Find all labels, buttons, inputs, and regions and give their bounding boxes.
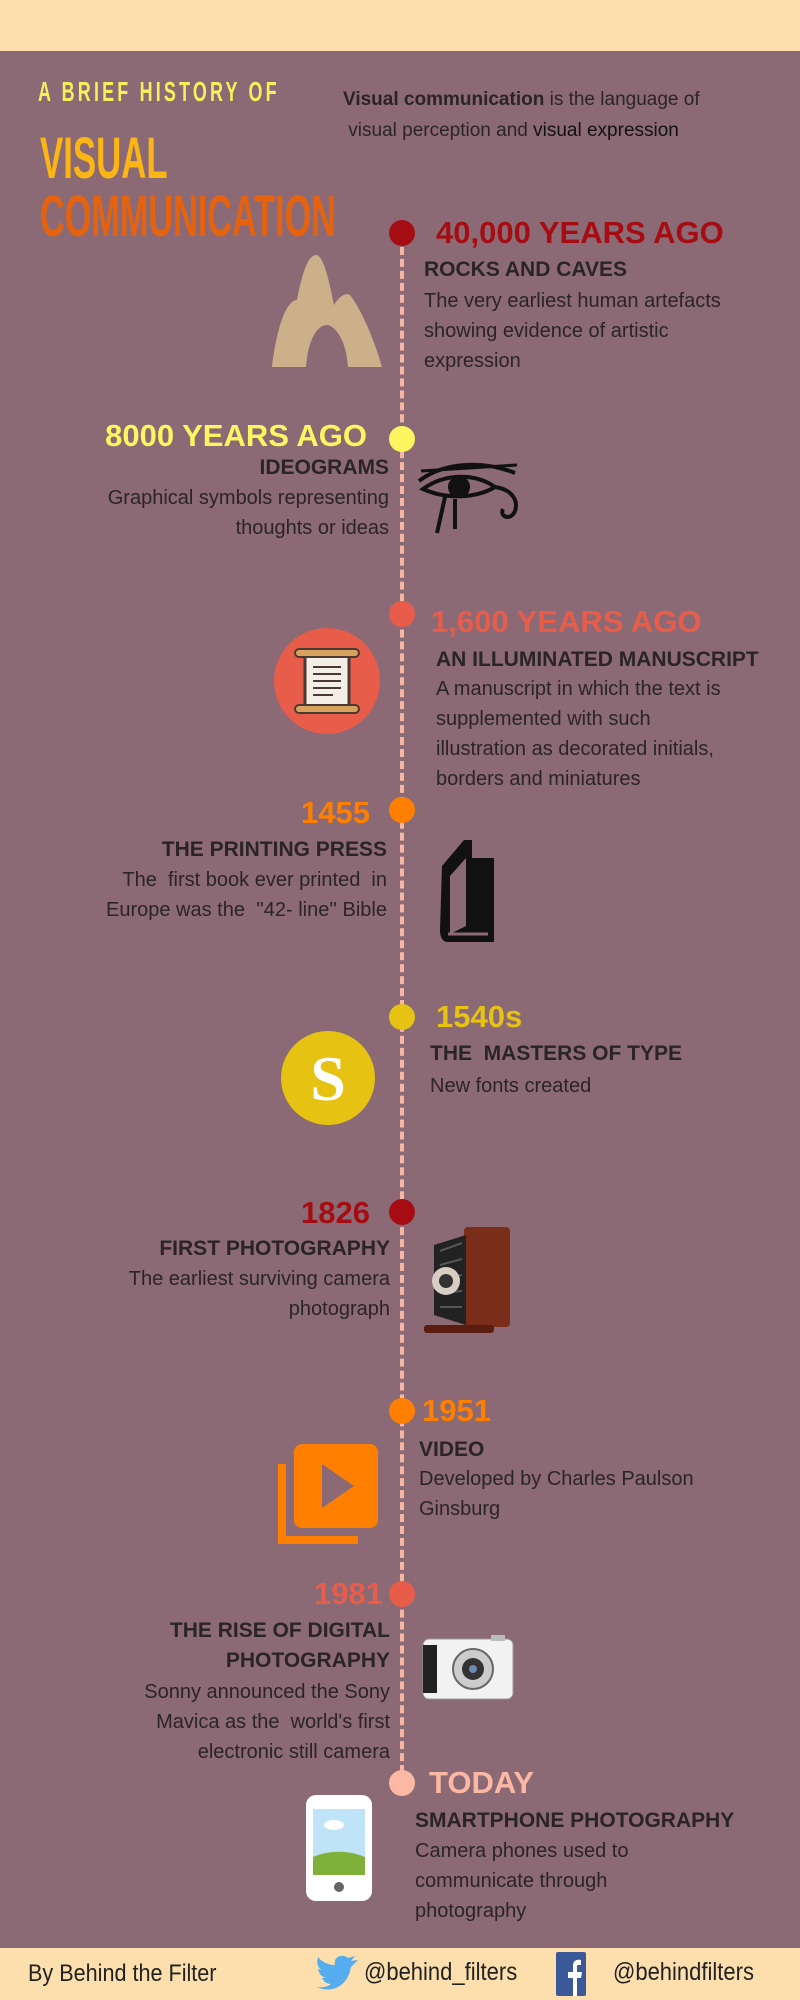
icon: cave — [272, 255, 382, 367]
entry: 1,600 years ago: supplemented with such — [436, 708, 651, 730]
top band — [0, 0, 800, 51]
entry: 1981: PHOTOGRAPHY — [226, 1649, 390, 1672]
icon: book — [440, 840, 494, 942]
icon: facebook — [556, 1952, 586, 1996]
icon: eye of horus — [418, 462, 518, 534]
entry: 1951: 1951 — [422, 1393, 491, 1428]
footer: By Behind the Filter — [28, 1960, 216, 1987]
icon: scroll circle — [274, 628, 380, 734]
entry: 1951: Ginsburg — [419, 1498, 500, 1520]
timeline line — [400, 235, 404, 1785]
icon: video play — [278, 1444, 378, 1544]
icon: vintage camera — [424, 1227, 510, 1333]
entry: 8000 years ago: 8000 YEARS AGO — [105, 418, 367, 453]
entry: 1455: The first book ever printed in — [122, 869, 387, 891]
entry: 40,000 years ago — [272, 215, 724, 372]
entry: 1981: 1981 — [314, 1576, 383, 1611]
title — [38, 76, 336, 249]
title: A BRIEF HISTORY OF — [38, 76, 280, 107]
entry: 1,600 years ago: illustration as decorated initials, — [436, 738, 714, 760]
icon: S circle — [281, 1031, 375, 1125]
entry: 1826: The earliest surviving camera — [129, 1268, 390, 1290]
intro text: Visual communication is the language of — [343, 89, 700, 110]
intro text: visual perception and visual expression — [348, 120, 679, 141]
entry: today: communicate through — [415, 1870, 607, 1892]
title: COMMUNICATION — [40, 184, 336, 249]
icon: S circle: S — [310, 1043, 346, 1114]
entry: 1455: 1455 — [301, 795, 370, 830]
footer — [0, 1948, 800, 2000]
entry: 1951: Developed by Charles Paulson — [419, 1468, 694, 1490]
entry: 40,000 years ago: 40,000 YEARS AGO — [436, 215, 724, 250]
entry: today: SMARTPHONE PHOTOGRAPHY — [415, 1809, 734, 1832]
entry: 1826 — [129, 1195, 510, 1333]
icon: smartphone — [306, 1795, 372, 1901]
entry: 8000 years ago: Graphical symbols representing — [108, 487, 389, 509]
footer: @behind_filters — [364, 1958, 517, 1986]
entry: 1455 — [106, 795, 494, 942]
entry: 40,000 years ago: expression — [424, 350, 521, 372]
entry: 8000 years ago — [105, 418, 518, 539]
entry: 1,600 years ago — [274, 601, 759, 790]
entry: 1540s: New fonts created — [430, 1075, 591, 1097]
entry: today: Camera phones used to — [415, 1840, 628, 1862]
entry: 1455: Europe was the ''42- line'' Bible — [106, 899, 387, 921]
title: VISUAL — [40, 126, 168, 191]
footer: @behindfilters — [613, 1958, 754, 1986]
entry: 8000 years ago: thoughts or ideas — [236, 517, 389, 539]
entry: 1540s — [281, 999, 682, 1125]
entry: 1826: 1826 — [301, 1195, 370, 1230]
entry: 1540s: THE MASTERS OF TYPE — [430, 1042, 682, 1065]
entry: today: photography — [415, 1900, 526, 1922]
entry: 1455: THE PRINTING PRESS — [162, 838, 387, 861]
entry: 40,000 years ago: showing evidence of artistic — [424, 320, 669, 342]
icon: twitter — [317, 1956, 358, 1990]
entry: 1,600 years ago: AN ILLUMINATED MANUSCRIPT — [436, 648, 759, 671]
entry: 1981: electronic still camera — [198, 1741, 390, 1763]
icon: digital camera — [422, 1635, 514, 1700]
entry: 1981: Sonny announced the Sony — [144, 1681, 390, 1703]
entry: today — [306, 1765, 734, 1922]
entry: 1540s: 1540s — [436, 999, 522, 1034]
entry: 1,600 years ago: borders and miniatures — [436, 768, 641, 790]
entry: 40,000 years ago: The very earliest human artefacts — [424, 290, 721, 312]
entry: 1951: VIDEO — [419, 1438, 484, 1461]
entry: 40,000 years ago: ROCKS AND CAVES — [424, 258, 627, 281]
entry: 1981: THE RISE OF DIGITAL — [170, 1619, 390, 1642]
entry: 1826: photograph — [289, 1298, 390, 1320]
entry: 8000 years ago: IDEOGRAMS — [259, 456, 389, 479]
intro text — [343, 89, 700, 141]
entry: 1826: FIRST PHOTOGRAPHY — [159, 1237, 390, 1260]
entry: 1,600 years ago: 1,600 YEARS AGO — [431, 604, 702, 639]
entry: 1951 — [278, 1393, 694, 1544]
entry: 1981 — [144, 1576, 514, 1763]
entry: today: TODAY — [429, 1765, 534, 1800]
entry: 1981: Mavica as the world's first — [156, 1711, 390, 1733]
entry: 1,600 years ago: A manuscript in which the text is — [436, 678, 721, 700]
